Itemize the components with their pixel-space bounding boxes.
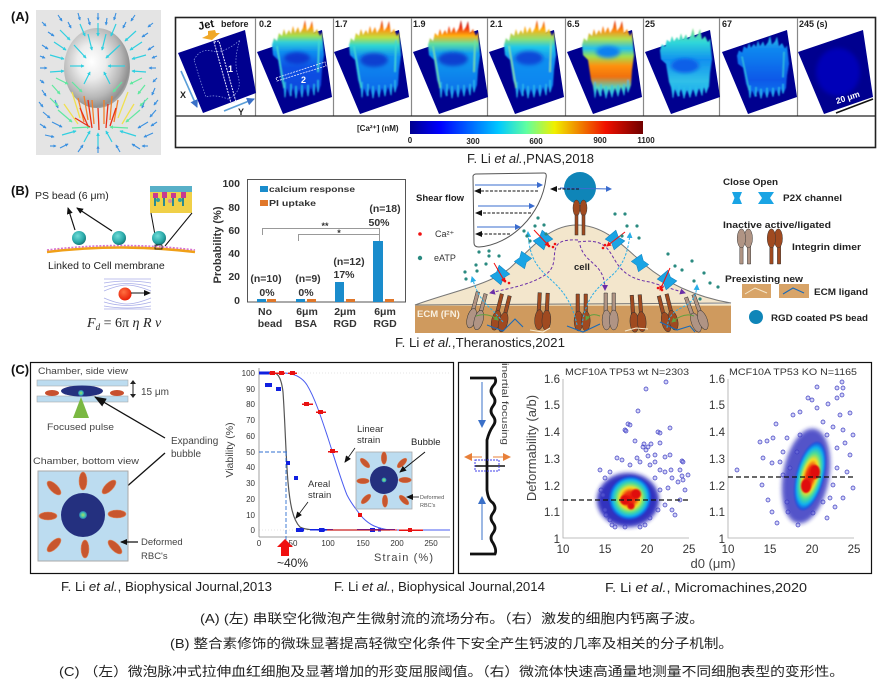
microfluidic channel: inertial focusing	[499, 363, 510, 445]
ECM layer	[415, 305, 731, 333]
panel: PS bead schematic: Linked to Cell membrane	[48, 260, 165, 272]
frame: 1.7 s	[334, 19, 409, 114]
bar chart: probability: Probability (%)	[212, 206, 224, 284]
legend: calcium response	[269, 184, 355, 194]
scatter: TP53 KO: 1.2	[709, 481, 725, 493]
frame: 6.5 s: 6.5	[567, 19, 580, 29]
x axis labels: 6μm	[296, 306, 318, 318]
legend: mechanism	[723, 177, 868, 324]
value labels: (n=12)	[333, 256, 365, 268]
scatter: TP53 KO: 1.1	[709, 507, 725, 519]
membrane	[47, 248, 195, 252]
y ticks: 70	[246, 416, 256, 425]
x axis labels: 2μm	[334, 306, 356, 318]
y ticks: 100	[242, 369, 256, 378]
y ticks: 80	[246, 400, 256, 409]
value labels	[250, 203, 401, 299]
sphere	[64, 28, 130, 108]
jet arrow	[202, 30, 220, 40]
cell body	[415, 225, 731, 305]
shared y axis title: Deformability (a/b)	[524, 395, 539, 501]
flow arrows blue	[39, 13, 158, 153]
strain labels: Linear	[357, 424, 383, 435]
legend: mechanism: Preexisting new	[725, 274, 804, 284]
panel: calcium wave time series	[175, 18, 876, 148]
scatter: TP53 wt: MCF10A TP53 wt N=2303	[565, 367, 689, 377]
ligands	[487, 319, 695, 332]
legend: mechanism: Inactive active/ligated	[723, 220, 831, 230]
x ticks: 0	[257, 539, 262, 548]
frame: 245 s: 245 (s)	[799, 19, 828, 29]
frame: 1.9 s: 1.9	[413, 19, 426, 29]
drag force formula: d	[96, 322, 101, 332]
frame dividers	[256, 18, 798, 116]
y axis labels: 100	[222, 178, 240, 190]
frame: 1.7 s: 1.7	[335, 19, 348, 29]
expanding bubble arrows	[95, 397, 165, 503]
viability chart: Viability (%)	[224, 422, 236, 478]
areal and linear curves	[259, 373, 450, 530]
frame: 2.1 s: 2.1	[490, 19, 503, 29]
bottom view chamber: Deformed	[141, 537, 183, 548]
frame: 25 s: 25	[645, 19, 655, 29]
panel: PS bead schematic	[35, 186, 195, 332]
frame: before: Y	[238, 107, 244, 117]
citation B: F. Li et al.,Theranostics,2021	[395, 335, 565, 350]
bottom view chamber: Chamber, bottom view	[33, 456, 139, 467]
scatter: TP53 KO: 1	[719, 534, 725, 546]
bars	[257, 241, 383, 302]
y axis labels: 60	[228, 225, 240, 237]
x ticks: 200	[390, 539, 404, 548]
citation C1: F. Li et al., Biophysical Journal,2013	[61, 579, 272, 594]
flow arrows cyan	[50, 23, 146, 146]
calcium influx arrows	[494, 230, 670, 290]
inset: bead surface	[150, 186, 192, 213]
panel: microfluidic deformability	[458, 362, 872, 574]
scatter: TP53 wt	[544, 367, 695, 556]
colorbar: 300	[466, 137, 480, 146]
caption line B: (B) 整合素修饰的微珠显著提高轻微空化条件下安全产生钙波的几率及相关的分子机制。	[170, 636, 733, 651]
value labels: (n=10)	[250, 273, 282, 285]
viability chart: Strain (%)	[374, 552, 433, 564]
scatter: TP53 wt: 1	[554, 534, 560, 546]
grid	[259, 373, 450, 530]
x axis labels: RGD	[373, 318, 397, 330]
viability chart: strain	[308, 490, 331, 501]
y axis labels	[222, 178, 240, 307]
calcium ions	[504, 243, 663, 291]
y ticks: 30	[246, 479, 256, 488]
inset bubble	[356, 437, 444, 509]
frame: before: before	[221, 19, 249, 29]
x axis labels: 6μm	[374, 306, 396, 318]
value labels: 50%	[368, 217, 390, 229]
legend	[260, 184, 355, 208]
citation C3: F. Li et al., Micromachines,2020	[605, 580, 807, 595]
frame: 0.2 s	[257, 19, 332, 114]
legend: mechanism: P2X channel	[783, 193, 842, 203]
panel label A: (A)	[11, 9, 29, 24]
panel: RBC bubble stretching	[30, 362, 454, 574]
scatter: TP53 KO: 1.3	[709, 454, 725, 466]
frame: before: X	[180, 90, 186, 100]
bead key	[749, 310, 763, 324]
frame: 1.9 s	[413, 19, 488, 114]
scatter: TP53 KO: 1.6	[709, 374, 725, 386]
scatter: TP53 KO	[709, 367, 860, 556]
side view chamber: 15 μm	[141, 387, 169, 398]
frame: 6.5 s	[567, 19, 642, 114]
scatter: TP53 wt: 1.3	[544, 454, 560, 466]
y axis labels: 80	[228, 202, 240, 214]
linear data points	[269, 371, 423, 532]
panel label B: (B)	[11, 183, 29, 198]
panel: RBC bubble stretching: bubble	[171, 449, 201, 460]
legend: mechanism: Close Open	[723, 177, 778, 187]
scatter: TP53 wt: 1.1	[544, 507, 560, 519]
colorbar: 600	[529, 137, 543, 146]
frame: 0.2 s: 0.2	[259, 19, 272, 29]
frame: 25 s	[645, 19, 720, 114]
scatter: TP53 KO: 25	[848, 544, 860, 556]
microfluidic channel	[465, 363, 510, 554]
Ca and eATP key: Ca²⁺	[435, 229, 455, 239]
side view chamber: Focused pulse	[47, 422, 114, 433]
y ticks	[242, 369, 256, 535]
shear flow box	[473, 173, 546, 247]
bar chart: probability	[212, 178, 406, 330]
citation C2: F. Li et al., Biophysical Journal,2014	[334, 579, 545, 594]
colorbar: [Ca²⁺] (nM)	[357, 124, 399, 133]
legend: mechanism: RGD coated PS bead	[771, 313, 868, 323]
y ticks: 10	[246, 511, 256, 520]
y ticks: 60	[246, 432, 256, 441]
bottom view chamber: RBC's	[141, 551, 168, 562]
panel: integrin mechanism diagram: cell	[574, 262, 590, 273]
scatter: TP53 KO: 1.5	[709, 400, 725, 412]
purple signalling arrows	[490, 240, 685, 293]
integrins	[465, 291, 710, 333]
drag force formula: η R v	[133, 316, 162, 331]
panel: integrin mechanism diagram: Shear flow	[416, 193, 465, 204]
colorbar: 900	[593, 136, 607, 145]
side view chamber	[37, 366, 169, 433]
scatter: TP53 wt: 1.4	[544, 427, 561, 439]
x axis labels	[258, 306, 397, 330]
viability chart: strain	[357, 435, 380, 446]
scatter: TP53 wt: 1.5	[544, 400, 560, 412]
frame: 2.1 s	[489, 19, 564, 114]
panel: microjet flow field image	[36, 10, 161, 155]
panel: PS bead schematic: PS bead (6 μm)	[35, 190, 109, 202]
frame: 67 s	[722, 19, 797, 114]
caption line C: (C) （左）微泡脉冲式拉伸血红细胞及显著增加的形变屈服阈值。（右）微流体快速高通量地测量不同细胞表型的变形性。	[59, 664, 844, 679]
drag force formula: F	[86, 316, 96, 331]
drag force diagram	[104, 279, 151, 309]
viability chart	[224, 368, 450, 570]
frame: before	[178, 18, 256, 117]
inset bubble: RBC's	[420, 503, 436, 509]
inset bubble: Deformed	[420, 495, 444, 501]
drag force formula: = 6π	[100, 316, 133, 331]
Ca and eATP key	[418, 229, 456, 263]
viability chart: Areal	[308, 479, 330, 490]
x axis labels: bead	[258, 318, 282, 330]
scatter: TP53 KO: 1.4	[709, 427, 726, 439]
significance brackets	[262, 228, 380, 241]
scatter: TP53 KO: 15	[764, 544, 776, 556]
value labels: 0%	[298, 287, 314, 299]
x axis labels: BSA	[295, 318, 318, 330]
panel: integrin mechanism diagram: ECM (FN)	[417, 309, 460, 320]
x ticks: 250	[424, 539, 438, 548]
frame: 0.2 s: 2	[301, 75, 306, 85]
inset bubble: Bubble	[411, 437, 441, 448]
y ticks: 90	[246, 385, 256, 394]
legend: mechanism: ECM ligand	[814, 287, 868, 297]
P2X channels	[490, 230, 677, 290]
citation A: F. Li et al.,PNAS,2018	[467, 151, 594, 166]
y ticks: 50	[246, 448, 256, 457]
50 percent guide	[259, 452, 287, 540]
panel: integrin mechanism diagram	[415, 172, 731, 333]
y ticks: 0	[251, 526, 256, 535]
frame: before: Jet	[197, 18, 216, 33]
shared x axis title: d0 (μm)	[690, 556, 736, 571]
y ticks: 40	[246, 463, 256, 472]
panel label C: (C)	[11, 362, 29, 377]
beads	[72, 231, 86, 245]
bottom view chamber	[33, 456, 183, 562]
green arrows	[476, 315, 694, 322]
colorbar	[357, 121, 655, 146]
x axis labels: RGD	[333, 318, 357, 330]
y ticks: 20	[246, 495, 256, 504]
flow arrows green	[50, 78, 148, 128]
frame: 245 s	[798, 19, 873, 114]
panel: RBC bubble stretching: Expanding	[171, 436, 218, 447]
scatter: TP53 wt: 15	[599, 544, 611, 556]
frame: before: 1	[228, 64, 233, 74]
scatter: TP53 KO: 20	[806, 544, 818, 556]
y axis labels: 20	[228, 271, 240, 283]
viability chart: ~40%	[277, 556, 308, 570]
scatter: TP53 wt: 1.2	[544, 481, 560, 493]
x axis labels: No	[258, 306, 272, 318]
legend: mechanism: Integrin dimer	[792, 242, 862, 252]
caption line A: (A) (左) 串联空化微泡产生微射流的流场分布。（右）激发的细胞内钙离子波。	[200, 611, 704, 626]
scatter: TP53 wt: 25	[683, 544, 695, 556]
legend: PI uptake	[269, 198, 316, 208]
value labels: (n=9)	[295, 273, 321, 285]
colorbar: 1100	[637, 136, 655, 145]
value labels: 0%	[259, 287, 275, 299]
RGD bead on integrin	[551, 172, 611, 235]
red 40 percent arrow	[277, 539, 293, 556]
x ticks: 50	[289, 539, 298, 548]
eATP molecules	[463, 212, 720, 301]
integrin key icons	[737, 229, 783, 264]
blue ATP release arrows	[472, 232, 697, 328]
scatter: TP53 wt: 10	[557, 544, 569, 556]
scale bar: 20 μm	[835, 89, 861, 106]
y axis labels: 0	[234, 295, 240, 307]
ECM ligand swatches	[742, 284, 809, 298]
x ticks: 100	[321, 539, 335, 548]
scatter: TP53 wt: 1.6	[544, 374, 560, 386]
scatter: TP53 wt: 20	[641, 544, 653, 556]
areal data points	[259, 372, 395, 532]
scatter: TP53 KO: MCF10A TP53 KO N=1165	[729, 367, 857, 377]
flow arrows yellow/red jet	[64, 92, 134, 130]
value labels: 17%	[333, 269, 355, 281]
side view chamber: Chamber, side view	[38, 366, 128, 377]
y axis labels: 40	[228, 248, 240, 260]
x ticks	[257, 539, 438, 548]
Ca and eATP key: eATP	[434, 253, 456, 263]
colorbar: 0	[408, 136, 413, 145]
P2X channel icons	[732, 192, 774, 204]
bar chart: probability: *	[337, 228, 341, 238]
x ticks: 150	[356, 539, 370, 548]
value labels: (n=18)	[369, 203, 401, 215]
bar chart: probability: **	[321, 221, 329, 231]
scatter: TP53 KO: 10	[722, 544, 734, 556]
frame: 67 s: 67	[722, 19, 732, 29]
